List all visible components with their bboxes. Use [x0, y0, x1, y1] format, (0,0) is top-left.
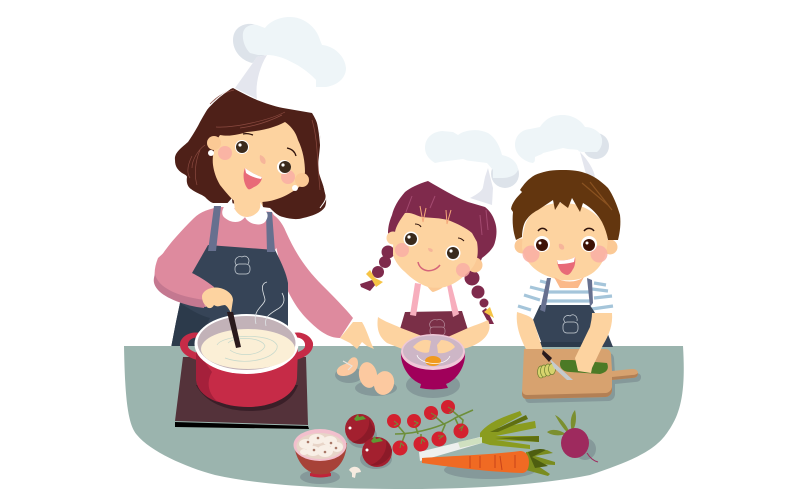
steam [255, 282, 284, 326]
broken shell [337, 357, 358, 376]
girl hair [388, 181, 496, 268]
boy left arm [517, 312, 545, 358]
boy hair [511, 170, 620, 240]
spoon [227, 312, 241, 348]
ears and earrings [207, 136, 221, 150]
mother head [180, 89, 326, 208]
mother hat [233, 17, 346, 114]
mother neck [233, 195, 263, 217]
apron straps [208, 206, 275, 252]
collar [222, 198, 268, 224]
cheeks [218, 146, 232, 160]
vegetables [294, 400, 598, 484]
mother right hand [340, 322, 374, 349]
soup swirl [217, 336, 277, 361]
leek [419, 411, 539, 461]
right arm [268, 212, 353, 338]
girl apron [396, 283, 472, 346]
forearm [155, 240, 214, 307]
eyes [235, 140, 249, 154]
carrot [422, 449, 555, 476]
girl head [386, 196, 488, 288]
hair strands [188, 90, 320, 190]
mouth [244, 168, 262, 189]
cherry tomatoes on vine [387, 400, 473, 456]
mother left hand [202, 287, 233, 313]
mother hands [202, 287, 374, 349]
boy hat [515, 115, 609, 178]
boy [511, 115, 641, 403]
brows [243, 134, 296, 156]
eggs [335, 357, 397, 397]
cucumber [560, 360, 608, 374]
induction stove [175, 357, 309, 429]
table [124, 346, 684, 489]
cucumber slices [538, 364, 556, 378]
girl's bowl [401, 334, 465, 398]
mushroom bowl [294, 429, 347, 478]
girl hat [425, 130, 519, 205]
boy shirt [517, 278, 613, 315]
mother [154, 17, 353, 348]
boy right arm [575, 313, 612, 373]
girl arms [377, 317, 490, 353]
mushroom [349, 467, 361, 478]
torso and shoulder [155, 207, 285, 287]
apron logo [430, 319, 445, 335]
mother hair [175, 88, 326, 219]
beetroot [547, 410, 598, 462]
apron [171, 245, 288, 348]
girl [360, 130, 519, 398]
nose [260, 155, 266, 164]
cooking pot [180, 282, 313, 411]
cutting board [522, 349, 641, 403]
braid bows [366, 270, 494, 318]
hair highlight [180, 89, 326, 208]
shadows [300, 424, 596, 484]
boy head [511, 170, 620, 288]
mother body [154, 195, 353, 348]
knife [549, 358, 573, 380]
girl braids [360, 246, 494, 324]
boy apron [533, 278, 613, 347]
apron logo [235, 256, 250, 274]
tomatoes [345, 414, 392, 467]
